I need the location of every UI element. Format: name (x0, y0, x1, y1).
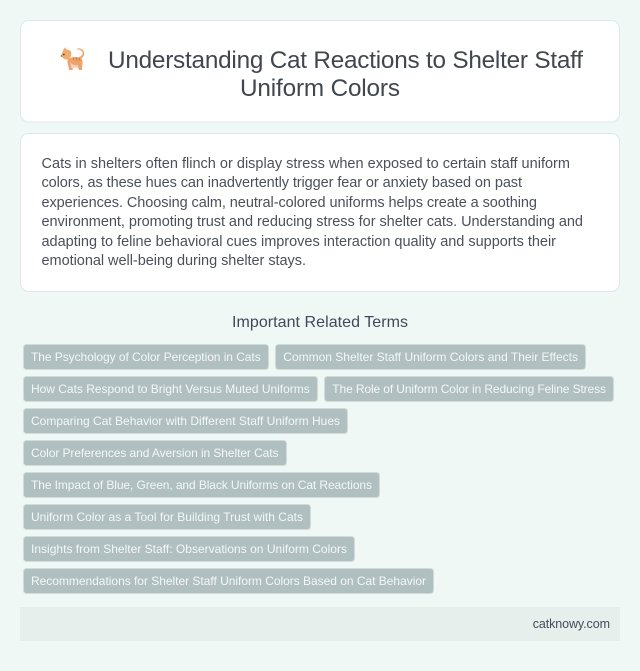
tag 6 (24, 440, 286, 466)
tag 5: Comparing Cat Behavior with Different Staff Uniform Hues (31, 414, 340, 428)
footer bar (20, 607, 620, 641)
title text: Uniform Colors (240, 75, 400, 102)
tag 10: Recommendations for Shelter Staff Uniform Colors Based on Cat Behavior (31, 574, 426, 588)
icon: orange cat (61, 48, 84, 70)
description text: colors, as these hues can inadvertently trigger fear or anxiety based on past (42, 175, 522, 191)
tag 8: Uniform Color as a Tool for Building Trust with Cats (31, 510, 303, 524)
description text: experiences. Choosing calm, neutral-colored uniforms helps create a soothing (42, 195, 537, 211)
tag 3: How Cats Respond to Bright Versus Muted Uniforms (31, 382, 310, 396)
description text (42, 156, 583, 269)
description text: adapting to feline behavioral cues improves interaction quality and supports their (42, 234, 556, 250)
tag 2 (276, 344, 586, 370)
tag 1 (24, 344, 268, 370)
tag 2: Common Shelter Staff Uniform Colors and Their Effects (283, 350, 578, 364)
tag 10 (24, 568, 434, 594)
tag 3 (24, 376, 318, 402)
tag 5 (24, 408, 348, 434)
title text: Understanding Cat Reactions to Shelter Staff (108, 47, 583, 74)
tag 4 (324, 376, 614, 402)
panel: related term tags (24, 344, 614, 594)
tag 1: The Psychology of Color Perception in Cats (31, 350, 261, 364)
tag 9 (24, 536, 354, 562)
description text: environment, promoting trust and reducing stress for shelter cats. Understanding and (42, 214, 583, 230)
panel: description (20, 134, 620, 292)
panel: title header (20, 20, 620, 122)
tag 6: Color Preferences and Aversion in Shelter Cats (31, 446, 278, 460)
tag 4: The Role of Uniform Color in Reducing Feline Stress (332, 382, 606, 396)
tag 7: The Impact of Blue, Green, and Black Uniforms on Cat Reactions (31, 478, 372, 492)
footer source text: catknowy.com (533, 617, 610, 631)
tag 7 (24, 472, 380, 498)
heading: important related terms: Important Related Terms (232, 314, 408, 331)
description text: Cats in shelters often flinch or display stress when exposed to certain staff uniform (42, 156, 570, 172)
tag 9: Insights from Shelter Staff: Observations on Uniform Colors (31, 542, 347, 556)
tag 8 (24, 504, 310, 530)
title text (108, 47, 583, 102)
description text: emotional well-being during shelter stays. (42, 253, 306, 269)
